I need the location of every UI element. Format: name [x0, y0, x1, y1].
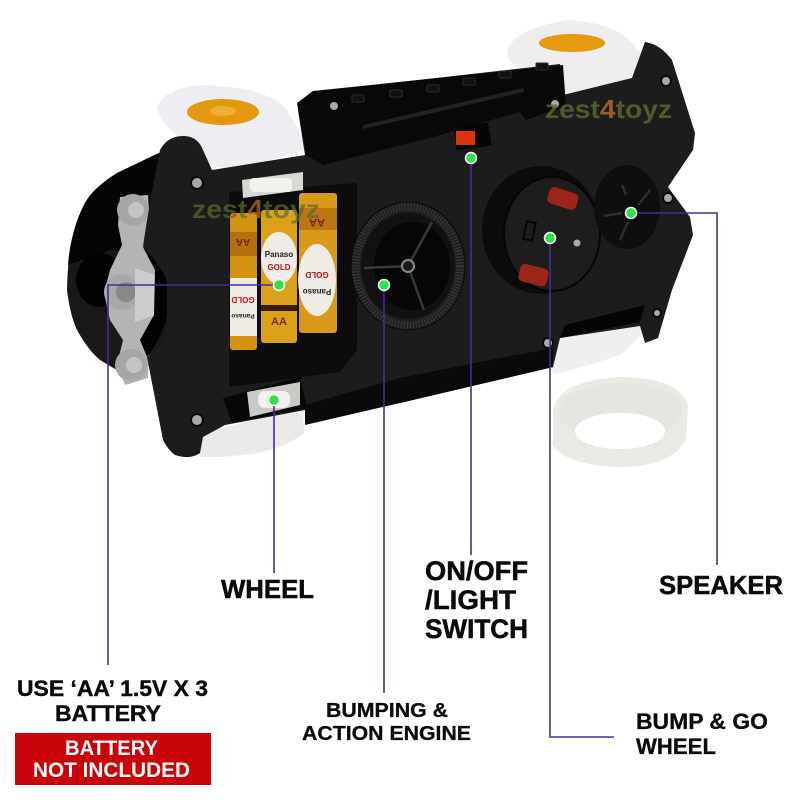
- battery left: AA: [236, 236, 250, 247]
- rail groove: [363, 88, 524, 129]
- bump and go wheel housing: [482, 166, 600, 294]
- label: speaker: SPEAKER: [659, 570, 783, 600]
- battery middle: AA: [271, 316, 287, 328]
- label: bump and go wheel: WHEEL: [636, 734, 716, 759]
- watermark battery: zest4toyz: [192, 194, 320, 224]
- label: bump and go wheel: BUMP & GO: [636, 709, 768, 734]
- battery left: Panaso: [231, 312, 255, 319]
- rear-left wheel upper: [157, 85, 305, 168]
- label: bumping and action engine: [302, 699, 471, 745]
- rear-right wheel upper: [507, 20, 655, 95]
- label: bumping and action engine: ACTION ENGINE: [302, 722, 471, 745]
- label: battery use: USE ‘AA’ 1.5V X 3: [17, 676, 208, 701]
- car shell behind chassis: [67, 150, 175, 378]
- screws: [191, 76, 673, 426]
- front-right bracket: [560, 305, 645, 338]
- label: on/off light switch: ON/OFF: [425, 556, 528, 586]
- callout lines: [108, 158, 717, 737]
- rail studs: [352, 63, 548, 102]
- battery middle: Panaso: [265, 250, 293, 259]
- battery right: [298, 193, 337, 333]
- chassis top rail: [297, 65, 566, 165]
- battery middle: GOLD: [267, 263, 291, 272]
- front wheel lower white: [550, 322, 645, 374]
- badge: battery not included: BATTERY: [65, 737, 158, 760]
- label: on/off light switch: [425, 556, 528, 644]
- top wheel clip: [242, 172, 303, 198]
- label: battery use: [17, 676, 208, 726]
- battery left: GOLD: [231, 295, 255, 304]
- badge: battery not included: [15, 733, 211, 785]
- power switch: [453, 123, 491, 150]
- bottom wheel clip: [223, 377, 307, 423]
- label: on/off light switch: /LIGHT: [425, 585, 517, 615]
- badge: battery not included: NOT INCLUDED: [33, 759, 190, 782]
- label: bump and go wheel: [636, 709, 768, 759]
- battery right: AA: [309, 216, 325, 228]
- silver front bumper: [104, 194, 155, 385]
- white spare ring: [553, 377, 688, 467]
- label: on/off light switch: SWITCH: [425, 614, 528, 644]
- speaker: [594, 165, 660, 249]
- battery right: Panaso: [303, 287, 331, 296]
- battery middle: [261, 210, 297, 343]
- rear wheel lower white: [200, 408, 304, 457]
- gear engine: [351, 202, 465, 330]
- black arch behind bumper: [140, 247, 169, 357]
- callout dots: [268, 152, 636, 406]
- toy car underside photo illustration: [67, 20, 695, 457]
- battery compartment: [229, 172, 357, 387]
- watermark top right: zest4toyz: [545, 94, 672, 124]
- chassis bottom rail: [305, 348, 553, 425]
- label: wheel: WHEEL: [221, 574, 314, 604]
- label: battery use: BATTERY: [55, 701, 161, 726]
- battery right: GOLD: [305, 270, 329, 279]
- battery left: [230, 213, 257, 350]
- chassis body: [143, 42, 695, 457]
- label: bumping and action engine: BUMPING &: [326, 699, 448, 722]
